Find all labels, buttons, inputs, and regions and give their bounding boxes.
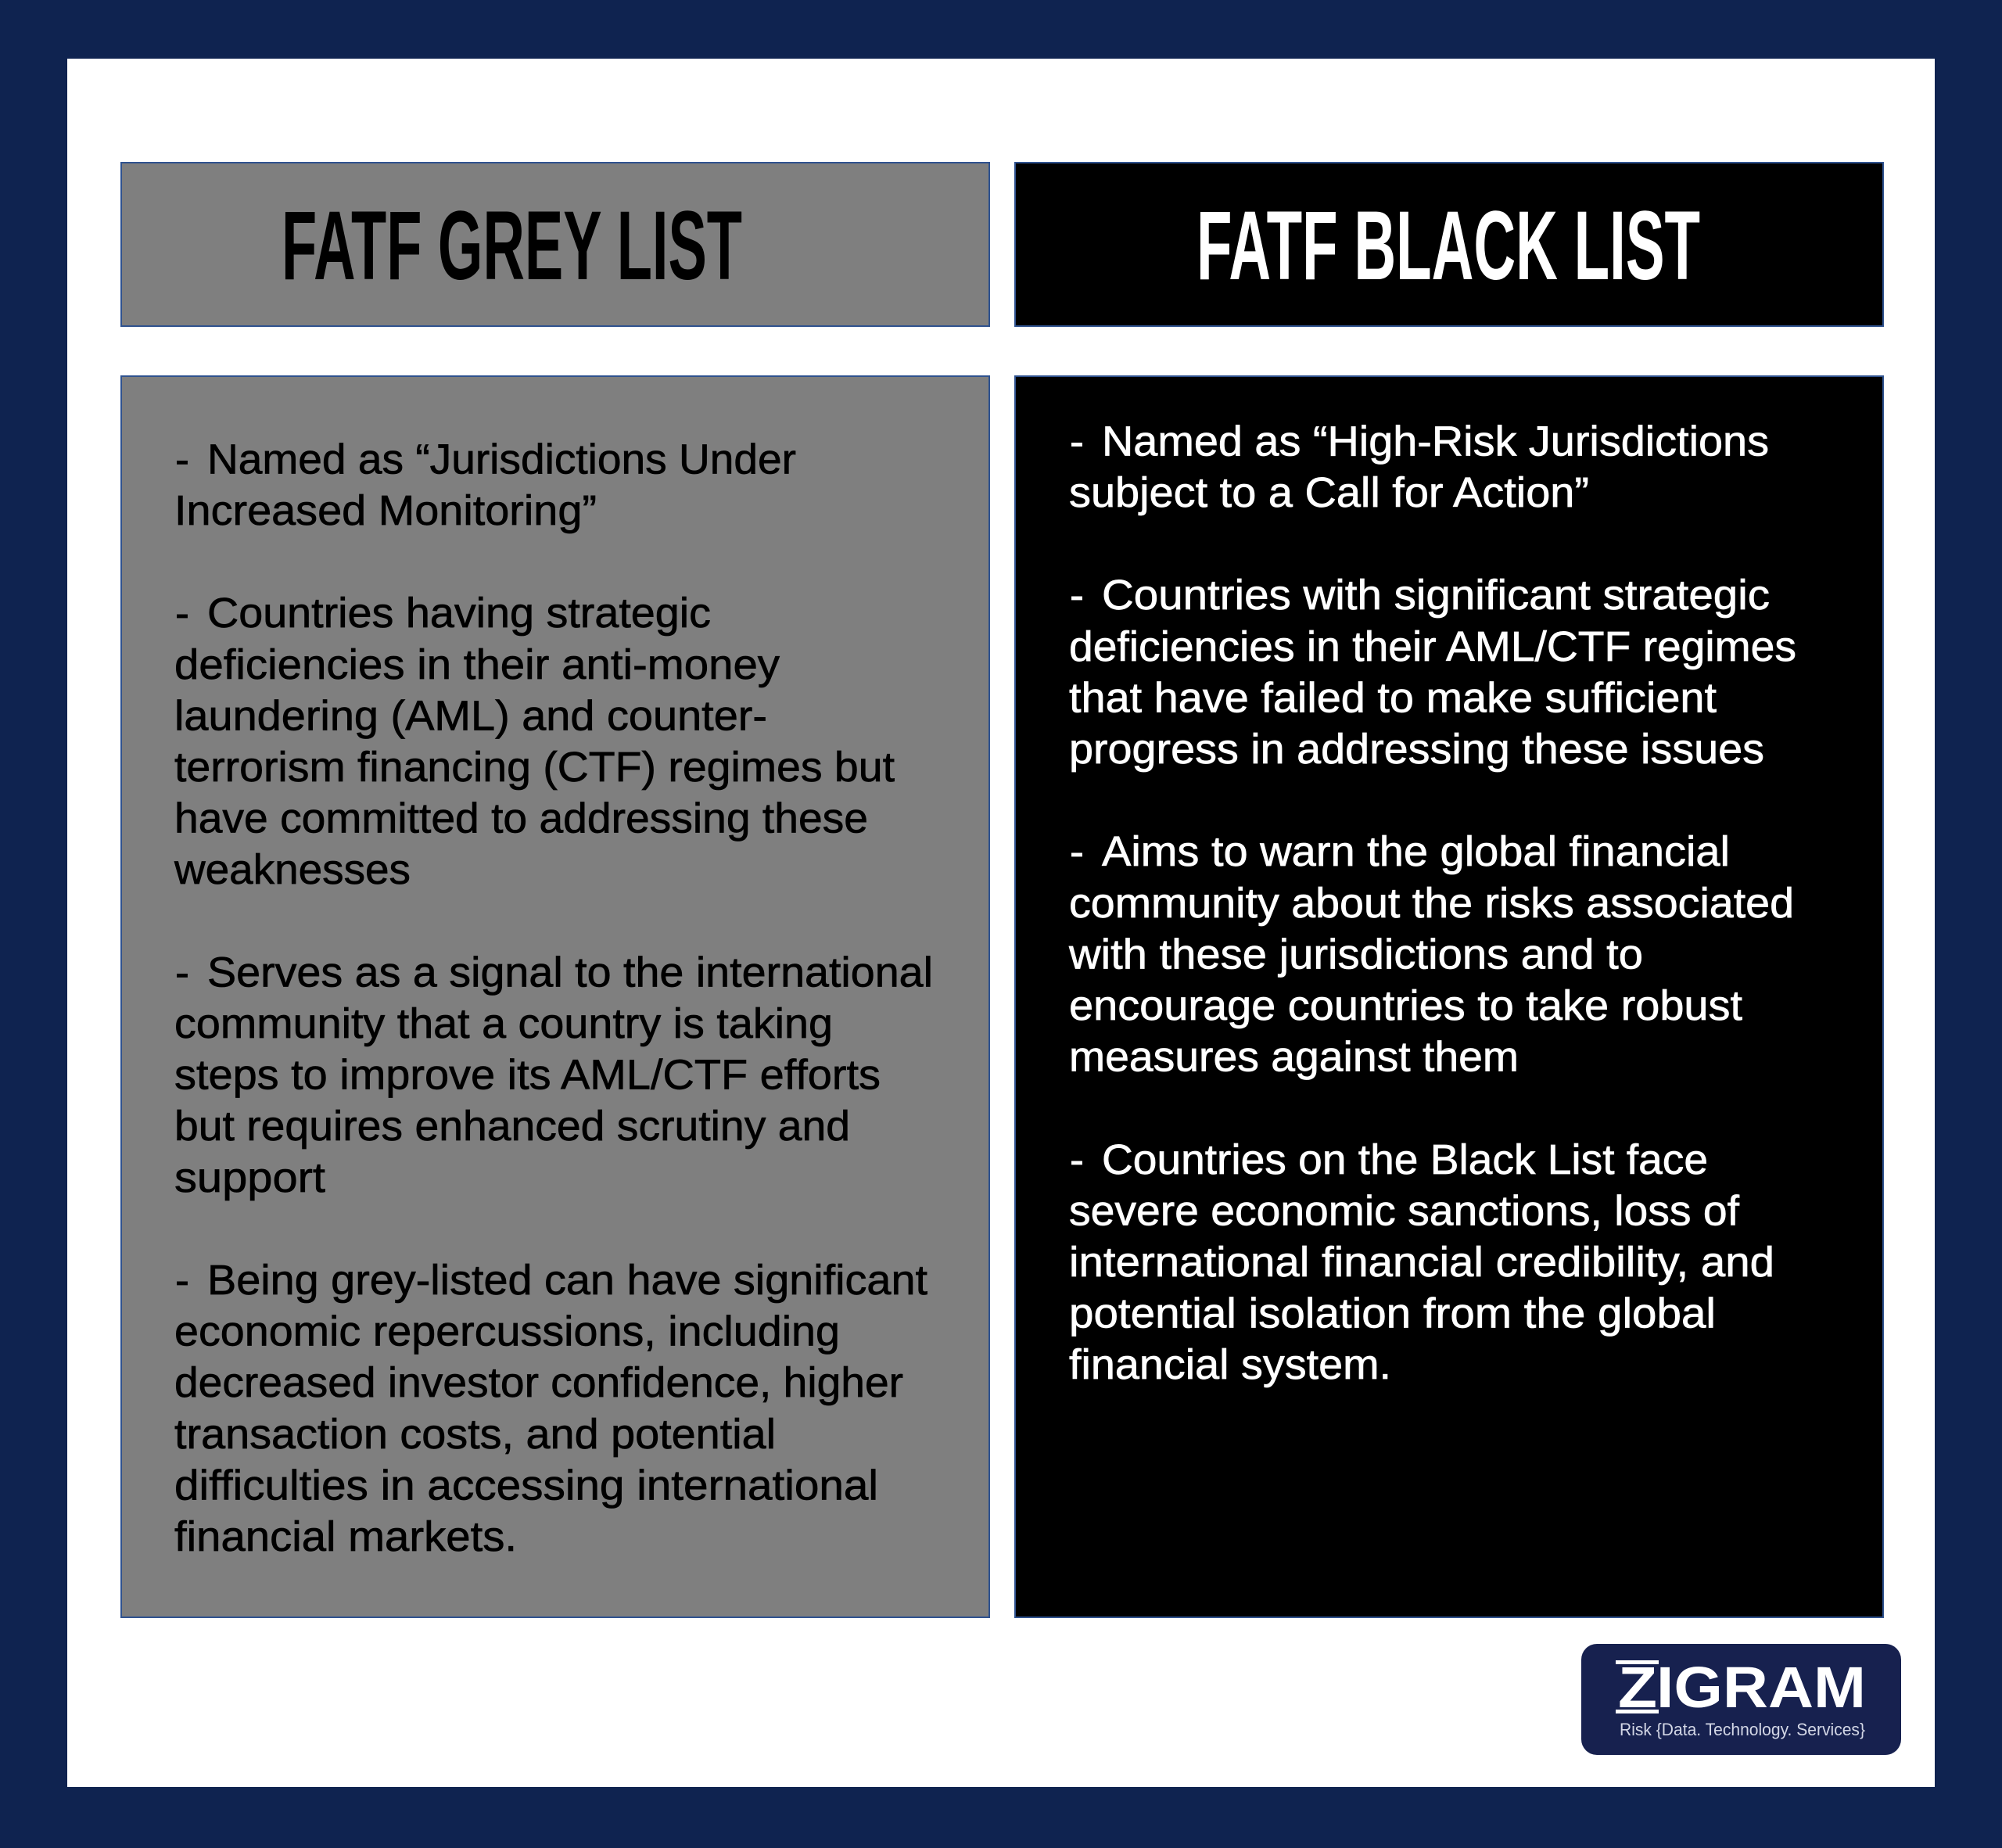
text block: grey list signal: Serves as a signal to the international bbox=[207, 949, 933, 996]
text block: grey list repercussions: Being grey-listed can have significant bbox=[207, 1257, 927, 1304]
text block: grey list repercussions: financial markets. bbox=[174, 1513, 517, 1560]
text block: grey list naming: Named as “Jurisdictions Under bbox=[207, 436, 796, 483]
text block: grey list countries: have committed to addressing these bbox=[174, 795, 868, 842]
text block: black list sanctions: Countries on the Black List face bbox=[1102, 1136, 1708, 1183]
text block: grey list countries: deficiencies in their anti-money bbox=[174, 641, 780, 688]
text block: grey list signal: community that a country is taking bbox=[174, 1000, 833, 1047]
logo: ZIGRAM: Risk {Data. Technology. Services} bbox=[1620, 1720, 1865, 1739]
text block: grey list countries: - bbox=[175, 590, 189, 637]
text block: grey list repercussions: difficulties in accessing international bbox=[174, 1462, 878, 1509]
text block: black list sanctions: financial system. bbox=[1069, 1341, 1391, 1388]
text block: black list warning: Aims to warn the global financial bbox=[1102, 828, 1730, 875]
text block: black list sanctions: severe economic sanctions, loss of bbox=[1069, 1187, 1740, 1234]
text block: grey list signal: steps to improve its AML/CTF efforts bbox=[174, 1052, 881, 1099]
text block: grey list signal: - bbox=[175, 949, 189, 996]
text block: grey list signal: support bbox=[174, 1154, 325, 1201]
text block: black list warning: community about the risks associated bbox=[1069, 880, 1794, 927]
text block: grey list countries: Countries having strategic bbox=[207, 590, 711, 637]
text block: black list sanctions bbox=[1069, 1136, 1774, 1388]
text block: black list countries: Countries with significant strategic bbox=[1102, 572, 1770, 619]
text block: black list warning bbox=[1068, 828, 1794, 1081]
text block: grey list repercussions: transaction costs, and potential bbox=[174, 1411, 776, 1458]
text block: black list sanctions: international financial credibility, and bbox=[1069, 1239, 1774, 1286]
text block: grey list naming bbox=[174, 436, 796, 534]
text block: black list countries bbox=[1069, 572, 1796, 773]
text block: grey list countries bbox=[174, 590, 895, 893]
panel: grey list header bbox=[121, 163, 989, 326]
text block: black list countries: deficiencies in their AML/CTF regimes bbox=[1069, 623, 1796, 670]
logo: ZIGRAM: Z bbox=[1618, 1655, 1657, 1720]
heading: FATF grey list: FATF GREY LIST bbox=[282, 192, 742, 300]
text block: grey list naming: - bbox=[175, 436, 189, 483]
text block: black list sanctions: potential isolation from the global bbox=[1069, 1290, 1716, 1337]
text block: black list countries: progress in addressing these issues bbox=[1069, 726, 1764, 773]
text block: grey list naming: Increased Monitoring” bbox=[174, 487, 597, 534]
text block: black list naming: Named as “High-Risk Jurisdictions bbox=[1102, 418, 1769, 465]
text block: black list naming bbox=[1069, 418, 1769, 516]
text block: black list sanctions: - bbox=[1070, 1136, 1084, 1183]
text block: grey list repercussions bbox=[174, 1257, 927, 1560]
text block: black list warning: - bbox=[1070, 828, 1084, 875]
logo: ZIGRAM: IGRAM bbox=[1656, 1655, 1866, 1720]
text block: grey list countries: weaknesses bbox=[174, 846, 411, 893]
text block: black list naming: subject to a Call for Action” bbox=[1069, 469, 1589, 516]
text block: black list warning: measures against them bbox=[1069, 1034, 1519, 1081]
text block: grey list countries: terrorism financing (CTF) regimes but bbox=[174, 744, 895, 791]
text block: grey list countries: laundering (AML) and counter- bbox=[174, 692, 767, 739]
logo: ZIGRAM bbox=[1581, 1644, 1901, 1755]
text block: grey list signal bbox=[174, 949, 933, 1201]
text block: black list warning: encourage countries to take robust bbox=[1069, 982, 1742, 1029]
text block: grey list repercussions: - bbox=[175, 1257, 189, 1304]
text block: black list warning: with these jurisdictions and to bbox=[1068, 931, 1643, 978]
panel: grey list body bbox=[121, 376, 989, 1617]
panel: black list header bbox=[1015, 163, 1883, 326]
panel: black list body bbox=[1015, 376, 1883, 1617]
text block: grey list repercussions: economic repercussions, including bbox=[174, 1308, 840, 1355]
text block: black list countries: - bbox=[1070, 572, 1084, 619]
text block: black list naming: - bbox=[1070, 418, 1084, 465]
text block: grey list signal: but requires enhanced scrutiny and bbox=[174, 1103, 850, 1150]
text block: black list countries: that have failed to make sufficient bbox=[1069, 674, 1717, 721]
text block: grey list repercussions: decreased investor confidence, higher bbox=[174, 1359, 903, 1406]
